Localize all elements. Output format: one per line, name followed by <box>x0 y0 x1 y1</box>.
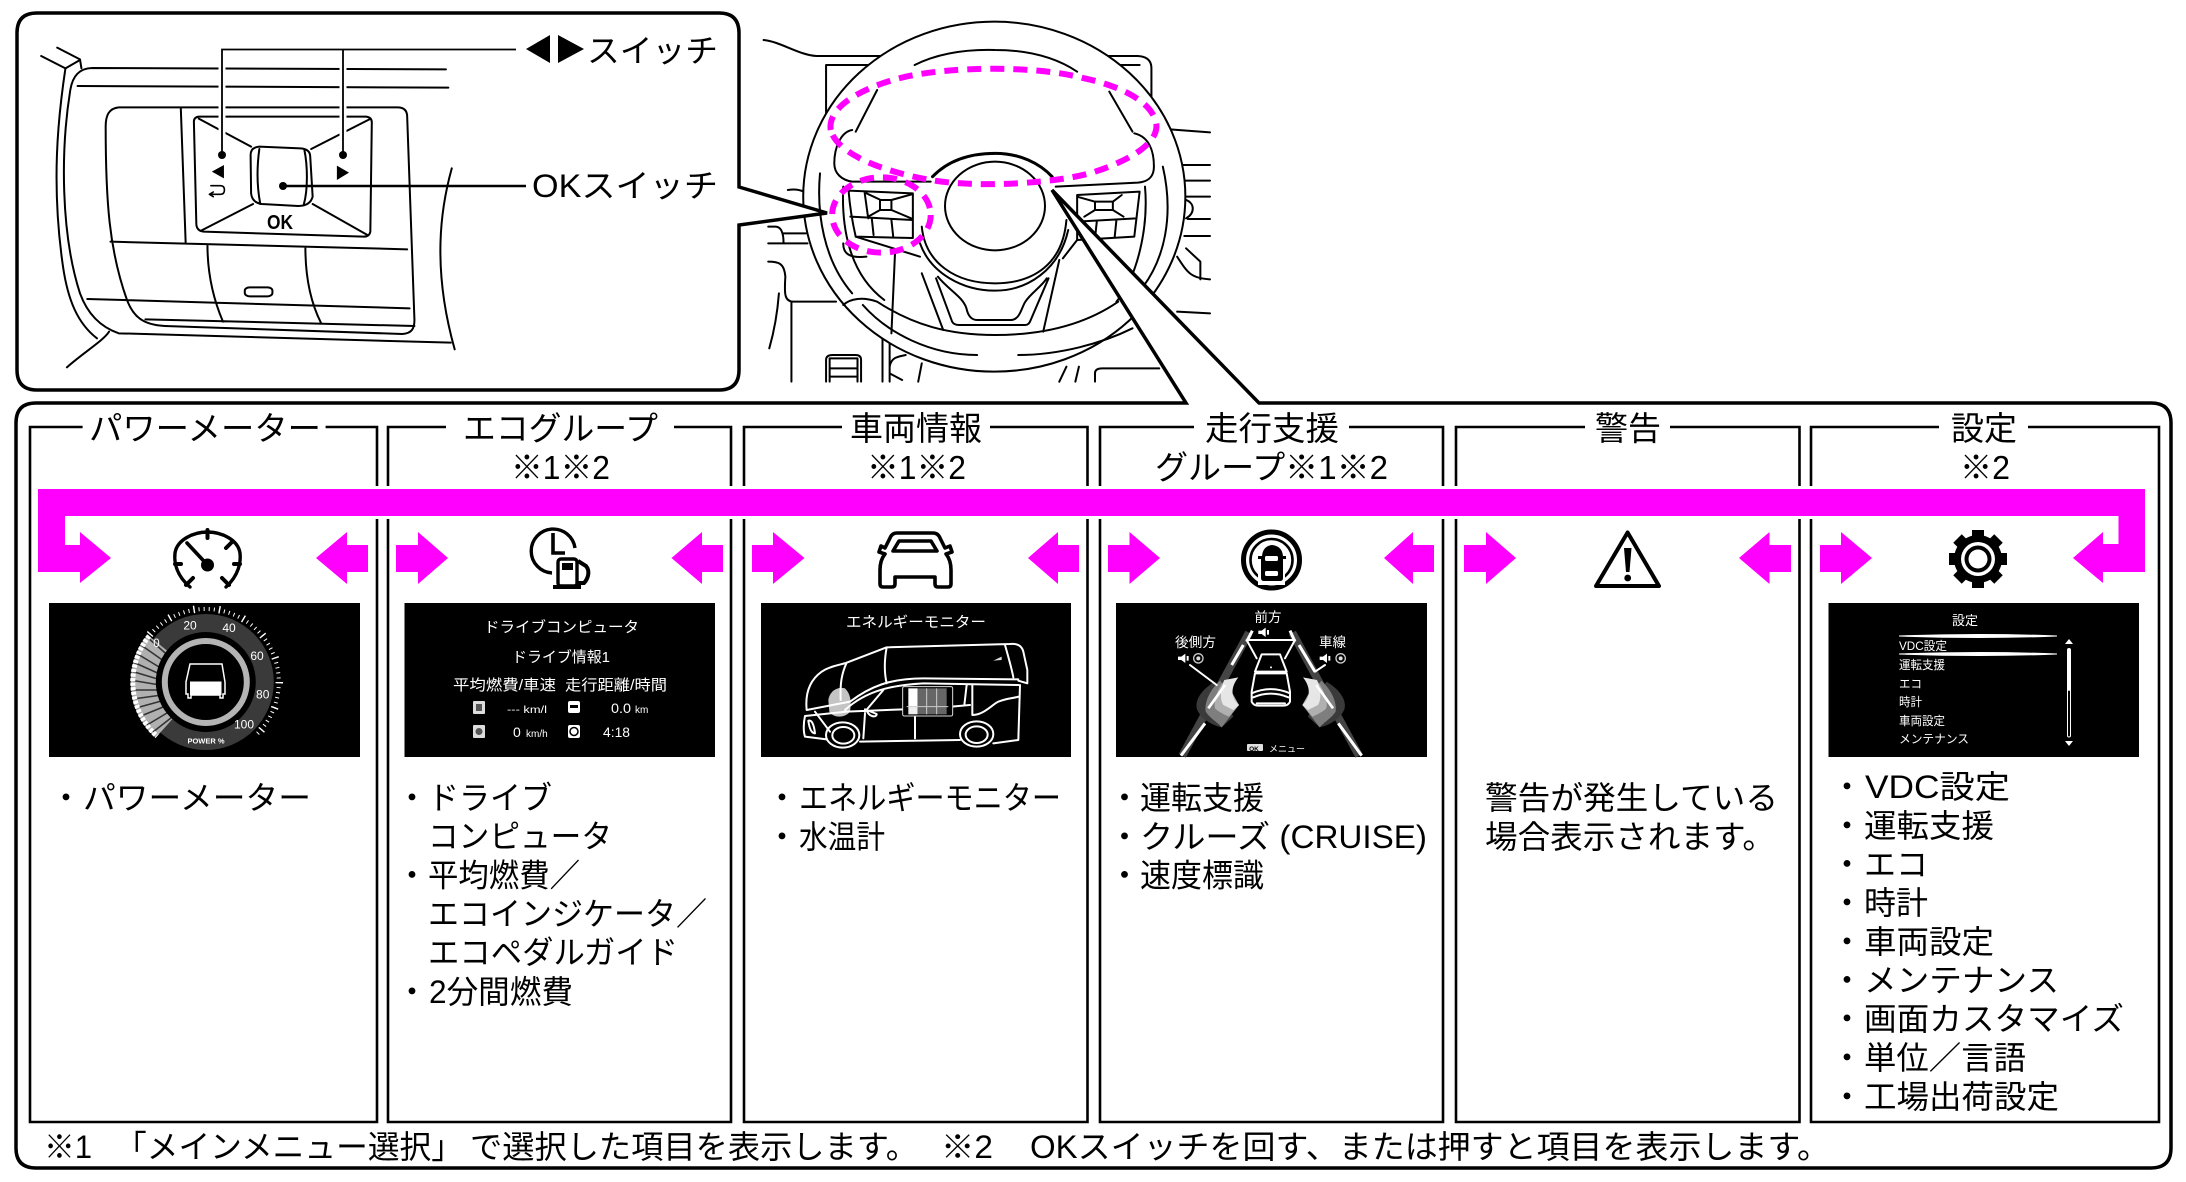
alert icons <box>1178 628 1345 663</box>
text: settings items: ・ <box>1831 1079 1863 1115</box>
text: vehicle info items <box>766 780 1061 855</box>
gauge dial: 20 <box>183 618 197 632</box>
footnote <box>44 1129 1830 1165</box>
heading: driving assist group <box>1155 410 1388 486</box>
text: settings items: ・ <box>1831 1040 1863 1076</box>
leader line: OK switch <box>279 182 526 190</box>
screen: settings: 運転支援 <box>1899 658 1945 672</box>
white gap above and below bar <box>372 486 1815 519</box>
arrows: cycling direction markers <box>316 532 1872 584</box>
text: eco group items: 平均燃費／ <box>428 858 580 894</box>
text: vehicle info items: 水温計 <box>799 819 885 855</box>
screen: settings: 車両設定 <box>1899 714 1945 728</box>
text: eco group items: ドライブ <box>428 780 552 816</box>
text: vehicle info items: ・ <box>766 780 798 816</box>
screen: eco group drive computer: km/h <box>526 729 548 740</box>
text: eco group items: エコペダルガイド <box>428 934 678 970</box>
OK key box <box>1247 744 1263 751</box>
icon: speedometer <box>175 530 240 587</box>
label: OK switch: OKスイッチ <box>532 168 718 204</box>
arrow: magenta loop bar <box>38 489 2145 583</box>
text: eco group items: ・ <box>396 858 428 894</box>
text: warning description <box>1485 780 1778 855</box>
heading: settings <box>1951 410 2017 486</box>
text: warning description: 警告が発生している <box>1485 780 1778 816</box>
text: settings items: 運転支援 <box>1864 808 1994 844</box>
text: settings items: 車両設定 <box>1864 924 1994 960</box>
icon: settings gear <box>1949 530 2007 588</box>
screen: driving assist: 前方 <box>1254 609 1282 625</box>
heading: settings: ※2 <box>1960 449 2010 486</box>
panel: switch detail callout <box>17 13 827 390</box>
text: settings items <box>1831 769 2124 1115</box>
illustration: steering switch <box>41 48 455 367</box>
gauge dial: 80 <box>256 688 270 702</box>
text: eco group items <box>396 780 707 1010</box>
footnote: ※1 <box>44 1129 92 1165</box>
text: driving assist items <box>1108 780 1427 894</box>
icon: fuel clock <box>531 529 588 589</box>
screen: eco group drive computer: 0 <box>513 724 521 740</box>
heading: vehicle info: 車両情報 <box>850 410 982 447</box>
screen: driving assist: OK <box>1249 746 1259 753</box>
footnote: ※2 <box>941 1129 993 1165</box>
screen: power meter <box>49 603 360 757</box>
van side outline <box>804 644 1027 748</box>
screen: driving assist <box>1116 603 1427 757</box>
screen: eco group drive computer: 平均燃費/車速 <box>453 676 556 694</box>
text: warning description: 場合表示されます。 <box>1485 819 1775 855</box>
text: settings items: ・ <box>1831 885 1863 921</box>
gauge dial <box>130 608 279 756</box>
text: settings items: メンテナンス <box>1864 962 2059 998</box>
text: vehicle info items: エネルギーモニター <box>799 780 1061 816</box>
text: driving assist items: ・ <box>1108 858 1141 894</box>
text: eco group items: コンピュータ <box>428 818 612 854</box>
heading: power meter: パワーメーター <box>89 410 321 447</box>
screen: settings: 時計 <box>1899 694 1922 709</box>
text: settings items: ・ <box>1831 924 1863 960</box>
label: arrow switch <box>526 33 718 69</box>
heading: eco group: ※1※2 <box>511 449 610 486</box>
screen: eco group drive computer: 0.0 <box>611 700 631 716</box>
text: settings items: VDC設定 <box>1865 769 2010 805</box>
footnote: 「メインメニュー選択」 <box>115 1129 463 1165</box>
text: eco group items: ・ <box>396 974 428 1010</box>
text: driving assist items: 運転支援 <box>1140 780 1264 816</box>
text: power meter items: パワーメーター <box>83 780 311 816</box>
detection zones <box>1196 677 1239 727</box>
text: power meter items: ・ <box>50 780 82 816</box>
screen: settings: VDC設定 <box>1899 639 1947 653</box>
column frames <box>30 427 2159 1122</box>
heading: eco group: エコグループ <box>463 410 658 447</box>
data icons <box>473 701 580 738</box>
text: settings items: 単位／言語 <box>1864 1040 2026 1076</box>
van rear silhouette <box>186 664 225 698</box>
van and sensor lines <box>1190 640 1325 706</box>
heading: eco group <box>463 410 658 486</box>
text: settings items: ・ <box>1831 846 1863 882</box>
heading: settings: 設定 <box>1951 410 2017 447</box>
leader lines: arrow switches <box>218 50 516 159</box>
text: eco group items: ・ <box>396 780 428 816</box>
gauge dial: 60 <box>250 649 264 663</box>
footnote: OKスイッチを回す、または押すと項目を表示します。 <box>1030 1129 1830 1165</box>
screen: settings: エコ <box>1899 677 1922 691</box>
screen: eco group drive computer: ドライブコンピュータ <box>484 618 639 636</box>
heading: warning: 警告 <box>1595 410 1661 447</box>
illustration: steering wheel overview <box>764 22 1210 382</box>
text: driving assist items: ・ <box>1108 819 1141 855</box>
lane lines <box>1182 633 1359 756</box>
screen: eco group drive computer: --- km/l <box>507 705 547 716</box>
text: driving assist items: クルーズ (CRUISE) <box>1140 819 1427 855</box>
icon: warning triangle <box>1596 532 1659 586</box>
text: eco group items: エコインジケータ／ <box>428 896 707 932</box>
screen: energy monitor: エネルギーモニター <box>846 614 986 631</box>
footnote: で選択した項目を表示します。 <box>470 1129 918 1165</box>
screen: driving assist: メニュー <box>1269 744 1305 754</box>
label: OK on switch: OK <box>267 212 293 234</box>
gauge dial: 100 <box>234 718 254 732</box>
gauge dial: 0 <box>153 638 160 650</box>
text: driving assist items: ・ <box>1108 780 1141 816</box>
gauge dial: 40 <box>222 621 236 635</box>
text: settings items: エコ <box>1864 846 1928 882</box>
text: driving assist items: 速度標識 <box>1140 858 1264 894</box>
screen: eco group drive computer: km <box>635 705 648 716</box>
text: settings items: ・ <box>1831 808 1863 844</box>
text: settings items: 画面カスタマイズ <box>1864 1001 2124 1037</box>
screen: eco group drive computer <box>404 603 715 757</box>
label: arrow switch: スイッチ <box>587 33 718 69</box>
text: settings items: 時計 <box>1864 885 1928 921</box>
screen: settings: 設定 <box>1952 613 1978 628</box>
heading: driving assist group: グループ※1※2 <box>1155 449 1388 486</box>
highlight: display area dashed ellipse <box>830 69 1156 184</box>
screen: driving assist: 後側方 <box>1175 635 1216 650</box>
text: eco group items: 2分間燃費 <box>429 974 573 1010</box>
battery pack <box>903 687 953 716</box>
highlight: switch dashed ellipse <box>832 177 931 253</box>
scroll bar <box>2065 639 2073 746</box>
text: settings items: ・ <box>1831 962 1863 998</box>
screen: settings <box>1828 603 2139 757</box>
icon: car front <box>879 533 952 587</box>
screen: settings: メンテナンス <box>1899 732 1969 746</box>
screen: eco group drive computer: 4:18 <box>603 724 630 740</box>
text: settings items: ・ <box>1831 1001 1863 1037</box>
screen: driving assist: 車線 <box>1319 635 1346 650</box>
icon: driving assist <box>1244 532 1300 588</box>
screen: eco group drive computer: 走行距離/時間 <box>565 677 667 694</box>
text: settings items: 工場出荷設定 <box>1864 1079 2059 1115</box>
screen: eco group drive computer: ドライブ情報1 <box>512 648 610 666</box>
gauge dial: POWER % <box>187 736 225 746</box>
heading: vehicle info <box>850 410 982 486</box>
text: settings items: ・ <box>1831 769 1863 805</box>
screen: energy monitor <box>761 603 1071 757</box>
text: vehicle info items: ・ <box>766 819 798 855</box>
heading: driving assist group: 走行支援 <box>1205 410 1339 447</box>
heading: vehicle info: ※1※2 <box>867 449 966 486</box>
